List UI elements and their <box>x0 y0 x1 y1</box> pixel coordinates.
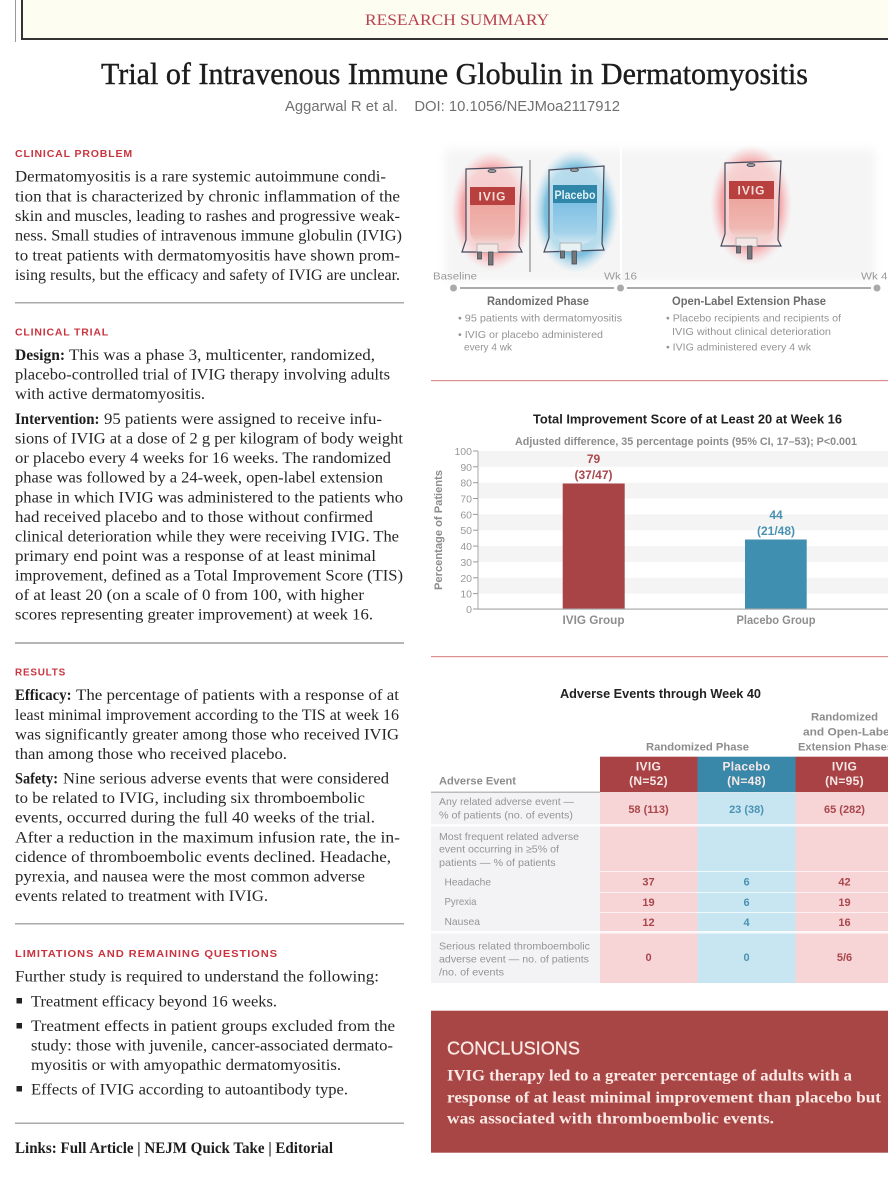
text: intervention: sions of IVIG at a dose of 2 g per kilogram of body weight <box>15 430 404 447</box>
y axis: 100 <box>454 446 472 458</box>
row: nausea <box>444 916 851 929</box>
row: pyrexia: 19 <box>838 897 851 909</box>
text: design: with active dermatomyositis. <box>15 386 205 403</box>
text: open-label extension phase: • Placebo recipients and recipients of <box>666 313 841 325</box>
text: intervention: improvement, defined as a Total Improvement Score (TIS) <box>15 568 403 584</box>
row: serious thromboembolic event: 5/6 <box>837 952 852 964</box>
header row <box>431 757 888 793</box>
bullet list: Treatment effects in patient groups excluded from the <box>31 1018 395 1035</box>
text: intervention: clinical deterioration while they were receiving IVIG. The <box>15 528 399 546</box>
text: open-label extension phase <box>666 296 841 354</box>
icon: IVIG bag extension phase: IVIG <box>737 184 766 198</box>
text: intervention: or placebo every 4 weeks for 16 weeks. The randomized <box>15 450 391 467</box>
text: intervention: primary end point was a response of at least minimal <box>15 548 376 565</box>
table: adverse events <box>431 687 888 983</box>
y axis: 0 <box>466 604 472 616</box>
table title: Adverse Events through Week 40 <box>560 687 761 701</box>
row: serious thromboembolic event: Serious related thromboembolic <box>439 940 590 952</box>
bar: IVIG group 79: IVIG Group <box>562 615 624 627</box>
row: pyrexia: Pyrexia <box>444 896 477 908</box>
section: clinical problem <box>15 149 402 284</box>
text: clinical problem body: skin and muscles, leading to rashes and progressive weak- <box>15 208 400 225</box>
bar: placebo group 44: Placebo Group <box>736 615 816 627</box>
icon: IVIG bag extension phase <box>710 145 792 265</box>
conclusions text: IVIG therapy led to a greater percentage of adults with a <box>447 1068 852 1085</box>
row: most frequent related adverse event: Most frequent related adverse <box>439 831 579 843</box>
y axis: 60 <box>460 509 472 521</box>
text: randomized phase: • 95 patients with dermatomyositis <box>458 313 622 325</box>
row: nausea: 12 <box>642 917 655 929</box>
timeline: Baseline <box>433 270 477 282</box>
text: randomized phase: every 4 wk <box>464 342 513 354</box>
row: serious thromboembolic event: /no. of events <box>439 967 504 979</box>
conclusions text: was associated with thromboembolic events. <box>447 1110 774 1127</box>
row: serious thromboembolic event <box>439 940 852 979</box>
section: results <box>15 668 400 905</box>
text: intervention: scores representing greater improvement) at week 16. <box>15 606 373 624</box>
row: headache: 42 <box>838 877 851 889</box>
row: pyrexia <box>444 896 851 909</box>
y axis: 80 <box>460 478 472 490</box>
text: safety: Safety: <box>15 770 58 787</box>
conclusions heading: CONCLUSIONS <box>447 1038 580 1058</box>
text: design <box>15 347 390 403</box>
links: Links: Full Article | NEJM Quick Take | Editorial <box>15 1140 333 1157</box>
bullet list: Effects of IVIG according to autoantibody type. <box>31 1082 348 1099</box>
text: intervention: had received placebo and to those without confirmed <box>15 509 373 526</box>
row: serious thromboembolic event: 0 <box>743 952 750 964</box>
text: safety <box>15 770 400 905</box>
chart title: Total Improvement Score of at Least 20 at Week 16 <box>533 412 842 426</box>
icon: IVIG bag randomized phase: IVIG <box>478 190 507 204</box>
conclusions text: response of at least minimal improvement than placebo but <box>447 1089 882 1106</box>
icon: placebo bag <box>533 149 619 273</box>
text: efficacy: The percentage of patients with a response of at <box>76 687 400 704</box>
text: clinical problem body: ising results, but the efficacy and safety of IVIG are unclear. <box>15 267 400 284</box>
heading: limitations: LIMITATIONS AND REMAINING QUESTIONS <box>15 949 278 960</box>
row: nausea: Nausea <box>444 916 480 928</box>
y axis: 90 <box>460 462 472 474</box>
icon: placebo bag: Placebo <box>554 190 596 202</box>
authors and DOI: Aggarwal R et al. DOI: 10.1056/NEJMoa2117912 <box>285 99 620 115</box>
chart subtitle: Adjusted difference, 35 percentage points (95% CI, 17–53); P<0.001 <box>515 436 857 448</box>
text: safety: After a reduction in the maximum infusion rate, the in- <box>15 829 400 846</box>
heading: clinical problem: CLINICAL PROBLEM <box>15 149 133 160</box>
header row: IVIG <box>636 760 661 774</box>
bullet list: study: those with juvenile, cancer-associated dermato- <box>31 1038 393 1055</box>
title: Trial of Intravenous Immune Globulin in Dermatomyositis <box>101 56 808 91</box>
bullet list: Treatment efficacy beyond 16 weeks. <box>31 994 277 1011</box>
row: nausea: 16 <box>838 917 851 929</box>
column group headers: Randomized Phase <box>646 742 749 754</box>
text: design: placebo-controlled trial of IVIG therapy involving adults <box>15 367 390 384</box>
bar chart: total improvement score <box>433 412 888 627</box>
header row: (N=48) <box>727 774 766 788</box>
text: efficacy: was significantly greater among those who received IVIG <box>15 726 399 744</box>
text: safety: pyrexia, and nausea were the most common adverse <box>15 869 365 886</box>
row: headache: 37 <box>642 877 655 889</box>
row: most frequent related adverse event: patients — % of patients <box>439 857 556 869</box>
y axis: 20 <box>460 573 472 585</box>
text: safety: Nine serious adverse events that were considered <box>63 770 389 787</box>
text: intervention: phase was followed by a 24-week, open-label extension <box>15 470 383 487</box>
text: randomized phase <box>458 296 622 354</box>
header row: (N=95) <box>825 774 864 788</box>
y axis: 70 <box>460 494 472 506</box>
y axis: Percentage of Patients <box>433 470 445 590</box>
header row: IVIG <box>832 760 857 774</box>
column group headers <box>646 712 888 754</box>
text: open-label extension phase: Open-Label Extension Phase <box>672 296 826 308</box>
bar: placebo group 44 <box>736 508 816 627</box>
heading: results: RESULTS <box>15 668 66 679</box>
text: clinical problem body: tion that is characterized by chronic inflammation of the <box>15 188 400 205</box>
text: efficacy: than among those who received placebo. <box>15 746 287 763</box>
row: headache: 6 <box>743 877 750 889</box>
bar: IVIG group 79: (37/47) <box>574 468 613 482</box>
text: randomized phase: • IVIG or placebo administered <box>458 329 603 341</box>
bullet list <box>16 994 395 1099</box>
bar: IVIG group 79 <box>562 452 625 627</box>
text: open-label extension phase: • IVIG administered every 4 wk <box>666 342 812 354</box>
timeline <box>433 270 888 292</box>
header banner: RESEARCH SUMMARY <box>365 12 549 29</box>
bar: placebo group 44: 44 <box>769 508 783 522</box>
row: pyrexia: 6 <box>743 897 750 909</box>
row: any related adverse event: Any related adverse event — <box>439 796 574 808</box>
text: randomized phase: Randomized Phase <box>487 296 589 308</box>
timeline: Wk 16 <box>604 270 637 282</box>
row: any related adverse event: 23 (38) <box>729 804 764 816</box>
row: headache: Headache <box>444 877 491 889</box>
text: open-label extension phase: IVIG without clinical deterioration <box>672 326 831 338</box>
row: most frequent related adverse event: event occurring in ≥5% of <box>439 844 559 856</box>
header banner <box>15 0 888 42</box>
header row: Adverse Event <box>439 775 516 787</box>
y axis: 50 <box>460 525 472 537</box>
text: intervention: 95 patients were assigned to receive infu- <box>104 411 382 428</box>
text: clinical problem body: to treat patients with dermatomyositis have shown prom- <box>15 247 400 264</box>
column group headers: Randomized <box>811 712 878 724</box>
heading: clinical trial: CLINICAL TRIAL <box>15 328 109 339</box>
text: design: This was a phase 3, multicenter, randomized, <box>69 347 375 364</box>
row: nausea: 4 <box>743 917 750 929</box>
text: efficacy: least minimal improvement according to the TIS at week 16 <box>15 707 399 724</box>
text: limitations intro: Further study is required to understand the following: <box>15 969 379 986</box>
y axis: 30 <box>460 557 472 569</box>
text: safety: cidence of thromboembolic events declined. Headache, <box>15 849 391 866</box>
text: efficacy <box>15 687 400 763</box>
section: limitations and remaining questions <box>15 949 395 1099</box>
text: clinical problem body: Dermatomyositis is a rare systemic autoimmune condi- <box>15 169 386 186</box>
text: intervention: of at least 20 (on a scale of 0 from 100, with higher <box>15 587 364 604</box>
row: any related adverse event <box>439 796 865 822</box>
row: serious thromboembolic event: adverse event — no. of patients <box>439 953 589 965</box>
row: most frequent related adverse event <box>439 831 579 869</box>
column group headers: and Open-Label <box>803 727 888 739</box>
text: efficacy: Efficacy: <box>15 687 72 704</box>
row: pyrexia: 19 <box>642 897 655 909</box>
column shading <box>431 793 888 983</box>
bar: IVIG group 79: 79 <box>587 452 600 466</box>
text: intervention <box>15 411 404 624</box>
header row: Placebo <box>722 760 771 774</box>
text: safety: events, occurred during the full 40 weeks of the trial. <box>15 810 375 827</box>
row: any related adverse event: % of patients (no. of events) <box>439 810 573 822</box>
text: clinical problem body: ness. Small studies of intravenous immune globulin (IVIG) <box>15 228 402 245</box>
text: clinical problem body <box>15 169 402 284</box>
row: headache <box>444 877 851 889</box>
bar: placebo group 44: (21/48) <box>757 524 795 538</box>
text: safety: to be related to IVIG, including six thromboembolic <box>15 790 365 807</box>
header row: (N=52) <box>629 774 668 788</box>
y axis: 40 <box>460 541 472 553</box>
icon: IVIG bag randomized phase <box>451 151 533 271</box>
y axis <box>433 446 478 616</box>
bullet list: myositis or with amyopathic dermatomyositis. <box>31 1057 341 1074</box>
text: intervention: Intervention: <box>15 411 100 428</box>
text: design: Design: <box>15 347 65 364</box>
row: any related adverse event: 58 (113) <box>628 804 669 816</box>
panel: conclusions <box>431 1011 888 1153</box>
text: intervention: phase in which IVIG was administered to the patients who <box>15 489 403 506</box>
y axis: 10 <box>460 589 472 601</box>
panel: trial design illustration <box>433 145 888 354</box>
row: serious thromboembolic event: 0 <box>645 952 652 964</box>
conclusions text <box>447 1068 882 1127</box>
text: safety: events related to treatment with IVIG. <box>15 888 268 905</box>
section: clinical trial <box>15 328 404 624</box>
row: any related adverse event: 65 (282) <box>824 804 865 816</box>
